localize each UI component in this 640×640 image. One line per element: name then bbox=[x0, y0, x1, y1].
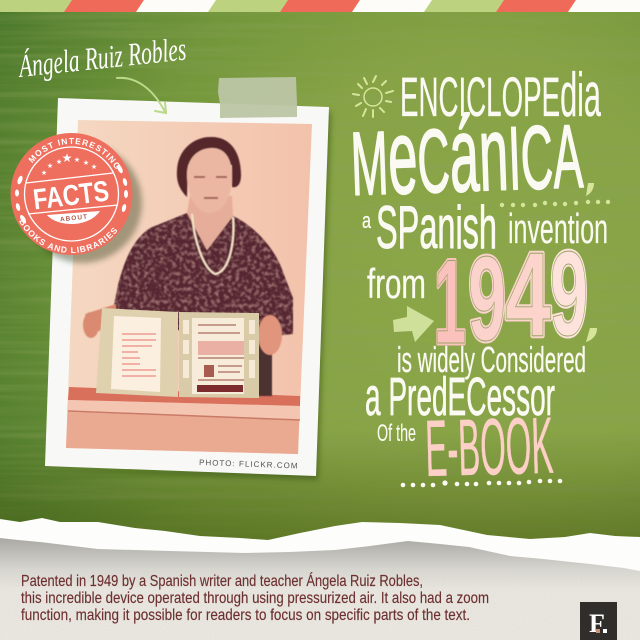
badge stars: ★ bbox=[83, 159, 89, 167]
badge stars bbox=[41, 151, 97, 177]
footer paragraph bbox=[21, 571, 489, 624]
year 1949: 4 bbox=[505, 228, 551, 362]
badge stars: ★ bbox=[62, 151, 72, 165]
paper body bbox=[0, 538, 640, 640]
year 1949: 1 bbox=[434, 235, 466, 369]
headline comma after Mecánica bbox=[586, 183, 594, 196]
badge stars: ★ bbox=[56, 158, 62, 166]
table bbox=[66, 398, 300, 454]
icon: sun bbox=[353, 76, 393, 117]
line: of the: Of the bbox=[377, 420, 416, 447]
badge side dots bbox=[15, 164, 128, 224]
FACTS word with rules: FACTS bbox=[31, 175, 111, 217]
arrow: name to photo bbox=[117, 78, 166, 113]
logo bbox=[580, 602, 617, 640]
badge shadow bbox=[22, 143, 142, 263]
photo credit: PHOTO: FLICKR.COM bbox=[199, 458, 299, 470]
face bbox=[187, 148, 232, 213]
badge: most interesting facts about books and libraries bbox=[10, 133, 146, 266]
year 1949: 4 bbox=[505, 228, 551, 362]
torn paper footer bbox=[0, 518, 640, 640]
encyclopedia device, right panel bbox=[179, 312, 259, 398]
badge curved text: BOOKS AND LIBRARIES bbox=[19, 220, 117, 254]
badge stars: ★ bbox=[74, 156, 80, 164]
badge stars: ★ bbox=[41, 169, 47, 177]
handwritten name: Ángela Ruiz Robles: Ángela Ruiz Robles bbox=[15, 30, 188, 85]
white polaroid frame bbox=[45, 98, 329, 476]
accent: dotted line lower bbox=[401, 479, 562, 487]
hair bbox=[177, 137, 241, 197]
torn white edge bbox=[0, 518, 640, 640]
footer paragraph: this incredible device operated through using pressurized air. It also had a zoom bbox=[21, 590, 489, 607]
footer paragraph: function, making it possible for readers to focus on specific parts of the text. bbox=[21, 607, 470, 624]
card shadow bbox=[47, 112, 331, 480]
logo: F bbox=[589, 609, 605, 638]
year 1949: 9 bbox=[468, 232, 506, 366]
year 1949: 1 bbox=[434, 235, 466, 369]
footer paragraph: Patented in 1949 by a Spanish writer and teacher Ángela Ruiz Robles, bbox=[21, 571, 423, 590]
badge stars: ★ bbox=[91, 163, 97, 171]
year 1949 bbox=[434, 227, 588, 369]
ABOUT ribbon: ABOUT bbox=[60, 214, 88, 223]
badge curved text bbox=[19, 138, 120, 254]
headline text bbox=[349, 61, 608, 447]
neck and chest bbox=[187, 196, 233, 250]
year 1949: 9 bbox=[468, 232, 506, 366]
line: from: from bbox=[367, 260, 426, 307]
badge disc bbox=[10, 133, 132, 255]
comma after 1949 bbox=[586, 328, 597, 342]
arrow: pointing to 1949 bbox=[393, 306, 434, 342]
necklace bbox=[192, 214, 233, 274]
hands bbox=[83, 312, 99, 338]
woman bbox=[83, 137, 293, 396]
tape strip bbox=[218, 77, 297, 118]
top striped airmail border bbox=[0, 0, 640, 12]
badge stars: ★ bbox=[47, 162, 53, 170]
photo card bbox=[45, 98, 331, 480]
year 1949: 9 bbox=[550, 227, 588, 361]
year 1949: 9 bbox=[550, 227, 588, 361]
badge curved text: MOST INTERESTING bbox=[28, 138, 120, 169]
encyclopedia device, left panel bbox=[96, 308, 178, 397]
photograph bbox=[66, 120, 312, 454]
accent: dotted line upper bbox=[500, 200, 610, 207]
line: a Spanish invention: a bbox=[362, 208, 372, 233]
line: a Spanish invention: SPanish bbox=[376, 194, 497, 261]
dress bbox=[114, 213, 293, 336]
